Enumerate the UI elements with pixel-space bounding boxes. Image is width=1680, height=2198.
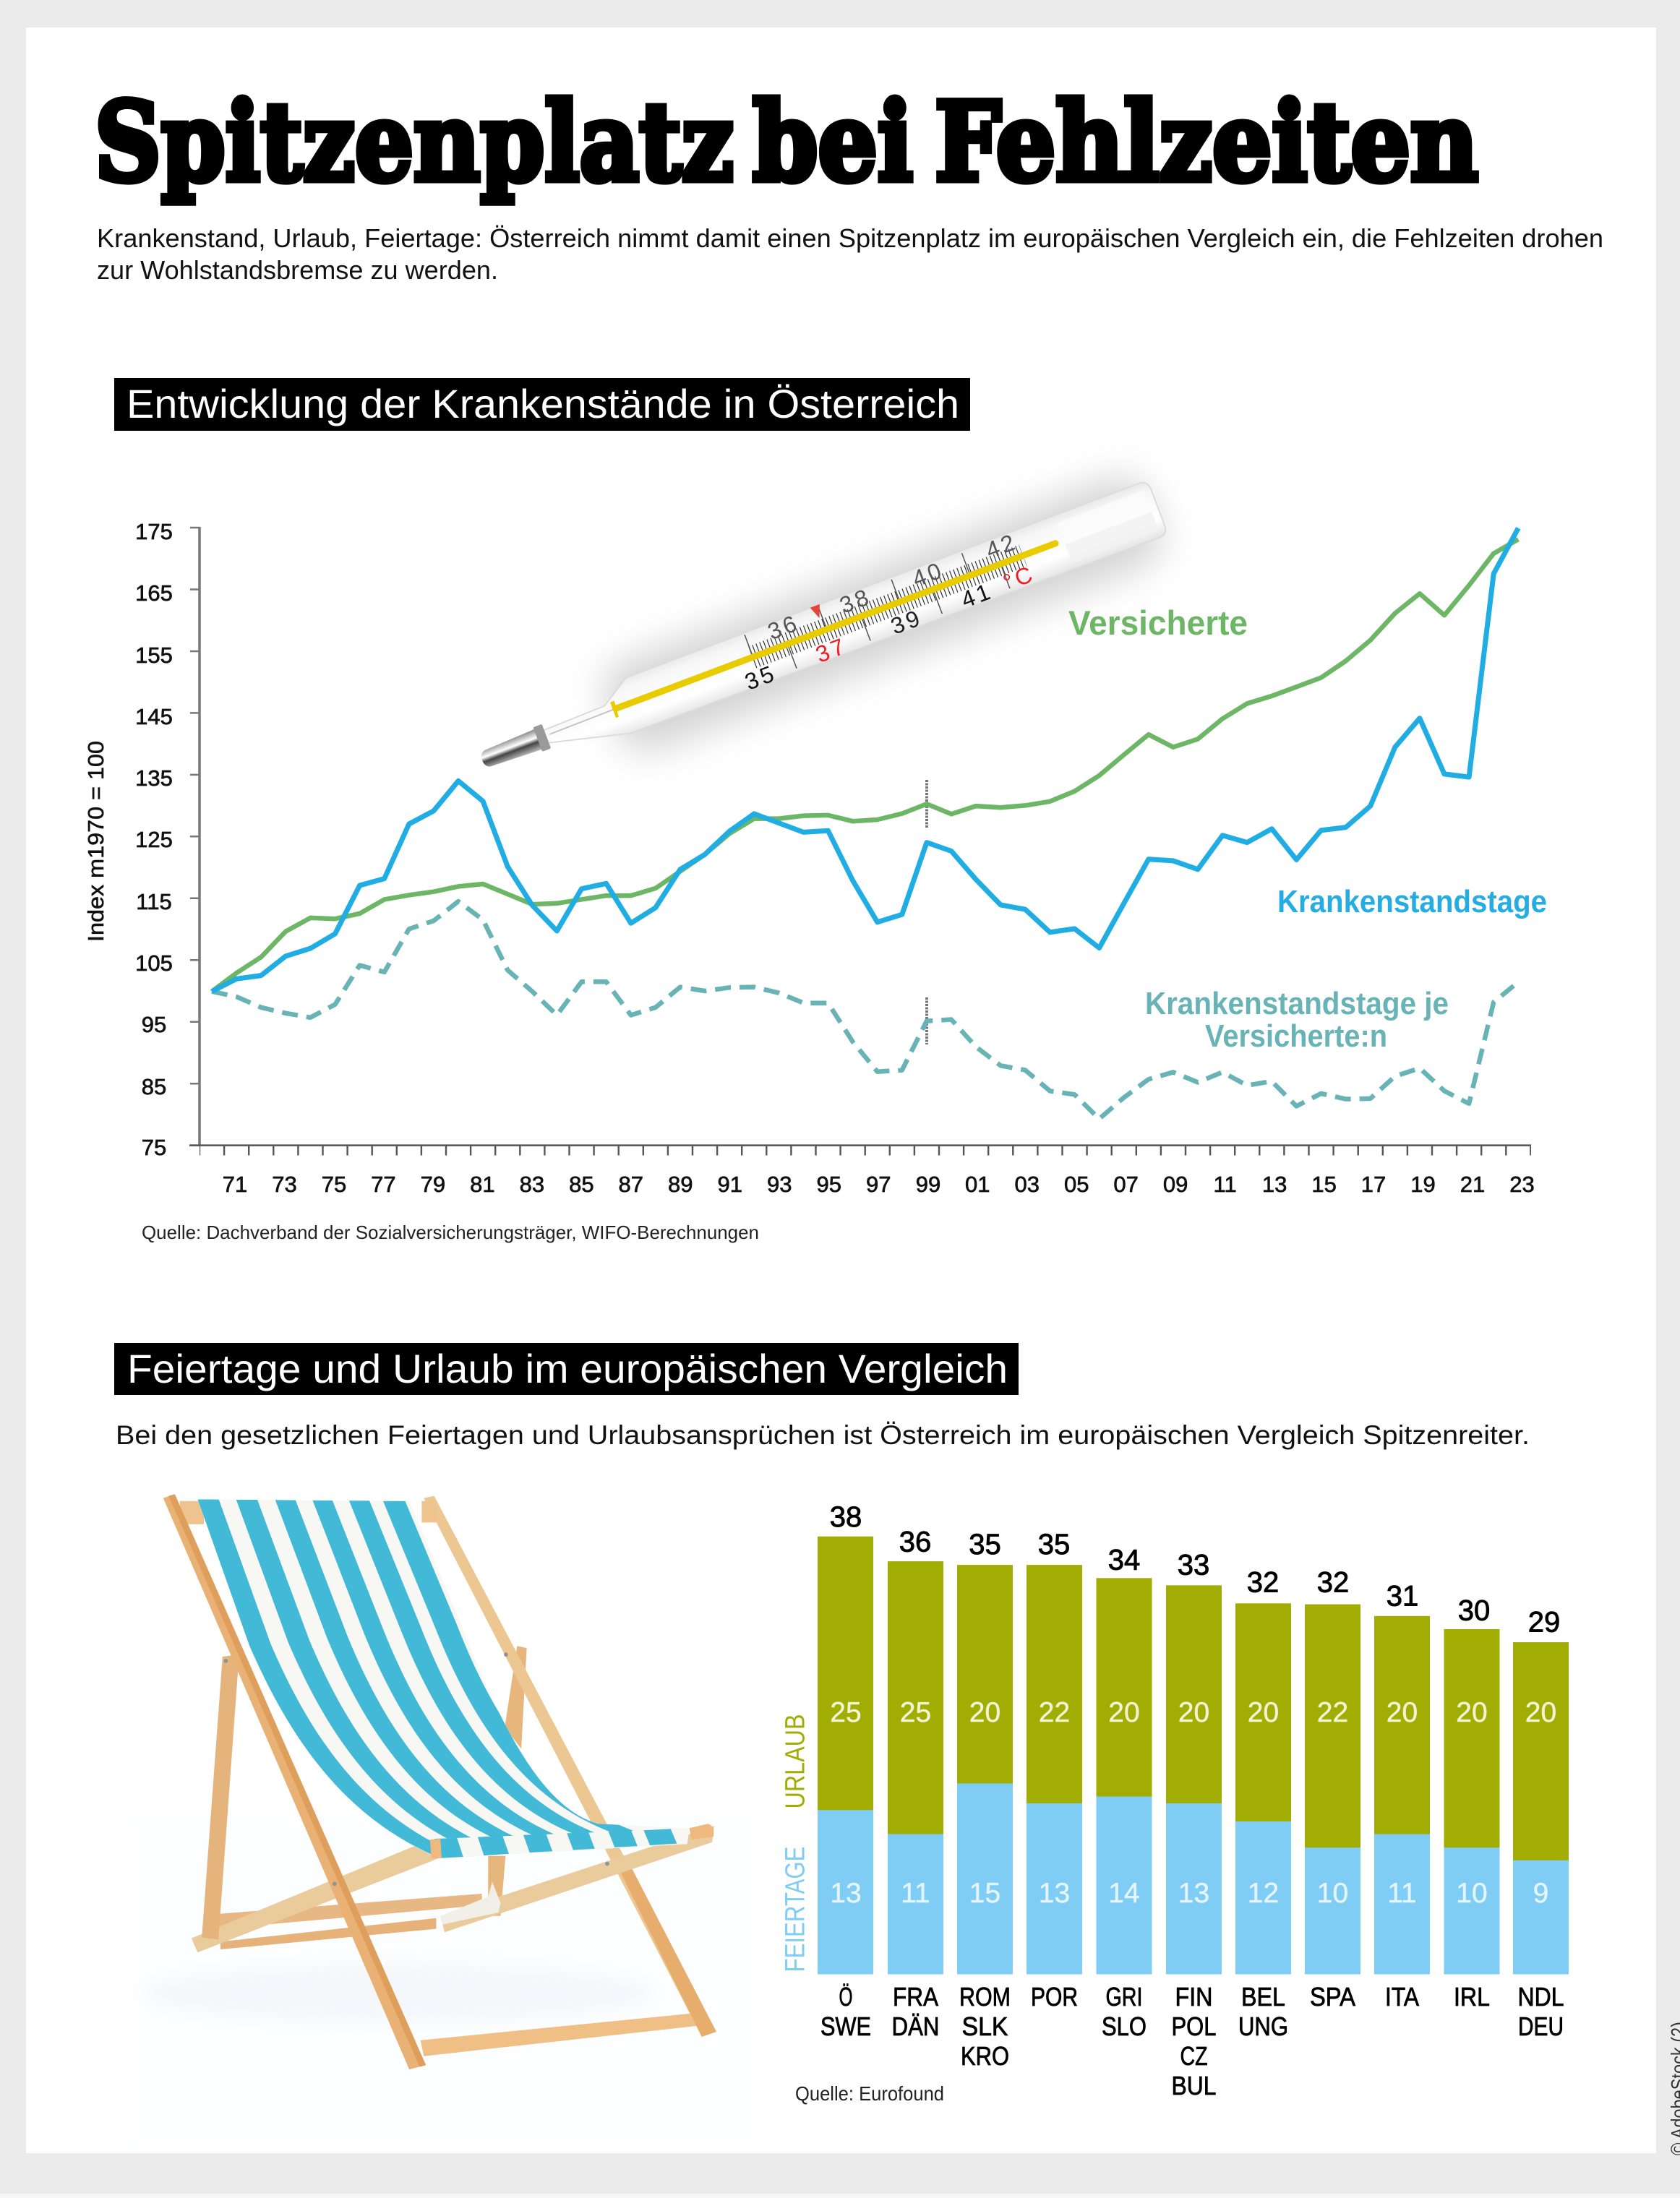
country labels: SPA <box>1310 1982 1355 2012</box>
Feiertage values: 13 <box>1178 1878 1209 1909</box>
x axis labels: 05 <box>1064 1172 1089 1197</box>
icon: thermometer: 37 <box>812 632 851 668</box>
title: Spitzenplatz <box>95 79 734 206</box>
line chart: Entwicklung der Krankenstände <box>83 519 1547 1197</box>
x axis labels: 03 <box>1014 1172 1040 1197</box>
x axis labels: 77 <box>371 1172 396 1197</box>
y axis title: Index m1970 = 100 <box>83 741 108 942</box>
Feiertage values: 11 <box>901 1878 930 1909</box>
x axis labels: 15 <box>1311 1172 1337 1197</box>
x axis labels: 75 <box>322 1172 346 1197</box>
x axis labels: 23 <box>1509 1172 1535 1197</box>
totals: 38 <box>830 1501 862 1533</box>
Feiertage values: 10 <box>1317 1878 1348 1909</box>
Urlaub values: 20 <box>1248 1697 1279 1728</box>
icon: thermometer: 39 <box>887 604 926 640</box>
x axis labels: 81 <box>470 1172 495 1197</box>
y axis labels: 75 <box>142 1135 166 1160</box>
x axis labels: 93 <box>767 1172 792 1197</box>
x axis <box>189 1146 1531 1151</box>
icon: thermometer: 41 <box>958 578 996 613</box>
country labels: ROM <box>959 1982 1011 2012</box>
x axis labels: 95 <box>817 1172 841 1197</box>
title <box>95 79 1478 206</box>
x axis labels: 87 <box>619 1172 643 1197</box>
Urlaub values: 20 <box>1456 1697 1488 1728</box>
totals: 33 <box>1178 1550 1209 1581</box>
y axis labels: 155 <box>135 643 173 668</box>
country labels: SWE <box>820 2012 871 2041</box>
seat band <box>436 1829 690 1858</box>
country labels: FIN <box>1175 1982 1213 2012</box>
x axis labels: 13 <box>1262 1172 1287 1197</box>
source note: bars: Quelle: Eurofound <box>795 2082 944 2105</box>
line: Krankenstandstage je Versicherte:n <box>212 901 1518 1119</box>
country labels: FRA <box>893 1982 938 2012</box>
Feiertage values: 15 <box>969 1878 1000 1909</box>
Feiertage values <box>830 1878 1548 1909</box>
series: Urlaub bars <box>818 1537 1569 1861</box>
y axis <box>190 527 200 1146</box>
Feiertage values: 14 <box>1108 1878 1140 1909</box>
x axis labels: 83 <box>520 1172 544 1197</box>
intro text <box>97 223 1603 285</box>
Feiertage values: 13 <box>830 1878 862 1909</box>
Urlaub values: 22 <box>1039 1697 1070 1728</box>
left arm <box>192 1839 442 1952</box>
Urlaub values: 22 <box>1317 1697 1348 1728</box>
country labels: NDL <box>1518 1982 1564 2012</box>
x axis labels: 07 <box>1113 1172 1139 1197</box>
series label: Krankenstandstage je Versicherte:n: Versicherte:n <box>1205 1018 1387 1054</box>
country labels: SLK <box>961 2012 1008 2041</box>
series label: Krankenstandstage je Versicherte:n: Krankenstandstage je <box>1145 986 1449 1021</box>
y axis labels: 95 <box>142 1012 166 1037</box>
country labels: CZ <box>1180 2041 1207 2071</box>
country labels: DÄN <box>892 2012 940 2041</box>
Urlaub values: 20 <box>1108 1697 1140 1728</box>
sub text: Bei den gesetzlichen Feiertagen und Urlaubsansprüchen ist Österreich im europäischen Vergleich Spitzenreiter. <box>116 1420 1530 1450</box>
Feiertage values: 11 <box>1387 1878 1417 1909</box>
y axis labels: 125 <box>135 827 173 852</box>
right arm <box>440 1826 714 1932</box>
foot bar <box>421 2012 703 2056</box>
y axis labels: 85 <box>142 1074 166 1099</box>
icon: thermometer <box>468 468 1175 808</box>
left rail <box>163 1494 426 2069</box>
x axis labels: 09 <box>1163 1172 1188 1197</box>
Feiertage values: 13 <box>1039 1878 1070 1909</box>
totals: 35 <box>969 1529 1001 1561</box>
country labels: GRI <box>1106 1982 1142 2012</box>
totals: 34 <box>1108 1544 1140 1576</box>
Urlaub values: 20 <box>1525 1697 1556 1728</box>
x axis labels: 89 <box>668 1172 693 1197</box>
country labels: POL <box>1171 2012 1216 2041</box>
icon: thermometer: 36 <box>764 609 802 645</box>
icon: thermometer: 38 <box>836 583 875 619</box>
y axis labels: 175 <box>135 519 173 544</box>
Urlaub values: 25 <box>830 1697 862 1728</box>
y axis labels: 145 <box>135 704 173 729</box>
right rail <box>424 1496 716 2037</box>
country labels: BEL <box>1241 1982 1285 2012</box>
intro text: Krankenstand, Urlaub, Feiertage: Österreich nimmt damit einen Spitzenplatz im europäischen Vergleich ein, die Fehlzeiten drohen <box>97 223 1603 253</box>
x axis labels: 11 <box>1214 1172 1237 1197</box>
country labels: ITA <box>1385 1982 1419 2012</box>
country labels: DEU <box>1518 2012 1564 2041</box>
Feiertage values: 9 <box>1533 1878 1548 1909</box>
series label: Krankenstandstage: Krankenstandstage <box>1277 884 1547 919</box>
y axis labels: 165 <box>135 580 173 606</box>
x axis labels: 01 <box>965 1172 990 1197</box>
country labels: BUL <box>1171 2071 1216 2100</box>
country labels <box>820 1982 1564 2100</box>
series label: Krankenstandstage je Versicherte:n <box>1145 986 1449 1054</box>
totals: 32 <box>1317 1567 1349 1599</box>
country labels: Ö <box>839 1982 853 2012</box>
x axis labels: 19 <box>1410 1172 1436 1197</box>
totals <box>830 1501 1560 1638</box>
totals: 36 <box>899 1527 931 1558</box>
y axis labels <box>135 519 173 1160</box>
legend: Urlaub: URLAUB <box>781 1714 811 1808</box>
intro text: zur Wohlstandsbremse zu werden. <box>97 255 498 285</box>
x axis labels: 71 <box>223 1172 247 1197</box>
cross dowels <box>218 1894 482 1929</box>
totals: 31 <box>1387 1580 1418 1612</box>
y axis labels: 115 <box>136 889 172 914</box>
line: Versicherte <box>212 539 1518 992</box>
break markers 1999 <box>925 780 928 1044</box>
Urlaub values: 20 <box>1387 1697 1418 1728</box>
icon: deck chair <box>157 1494 716 2070</box>
series label: Versicherte: Versicherte <box>1068 604 1248 642</box>
country labels: POR <box>1031 1982 1078 2012</box>
Feiertage values: 12 <box>1248 1878 1279 1909</box>
x axis labels <box>223 1172 1535 1197</box>
country labels: UNG <box>1238 2012 1288 2041</box>
icon: thermometer: 40 <box>909 557 948 592</box>
country labels: SLO <box>1102 2012 1147 2041</box>
x axis labels: 91 <box>718 1172 742 1197</box>
x axis labels: 73 <box>272 1172 297 1197</box>
x axis labels: 21 <box>1460 1172 1485 1197</box>
Feiertage values: 10 <box>1456 1878 1488 1909</box>
bracket <box>440 1881 500 1925</box>
icon: thermometer: °C <box>1000 560 1039 596</box>
left support leg <box>202 1654 239 1939</box>
Urlaub values: 20 <box>1178 1697 1209 1728</box>
y axis labels: 135 <box>135 765 173 791</box>
seat rod ends <box>690 1824 713 1839</box>
totals: 30 <box>1458 1594 1490 1626</box>
stacked bar chart: Feiertage und Urlaub <box>781 1501 1569 2100</box>
heading: Feiertage und Urlaub: Feiertage und Urlaub im europäischen Vergleich <box>127 1346 1008 1391</box>
legend: Feiertage: FEIERTAGE <box>781 1846 811 1972</box>
totals: 35 <box>1038 1529 1070 1561</box>
title: bei <box>753 79 913 206</box>
icon: thermometer: 35 <box>741 660 780 695</box>
totals: 29 <box>1528 1606 1560 1638</box>
x axis labels: 97 <box>866 1172 891 1197</box>
Urlaub values <box>830 1697 1556 1728</box>
x axis labels: 79 <box>421 1172 445 1197</box>
x axis labels: 85 <box>569 1172 594 1197</box>
top dowels <box>180 1501 204 1524</box>
totals: 32 <box>1247 1567 1279 1599</box>
fabric <box>192 1492 698 1865</box>
country labels: IRL <box>1454 1982 1490 2012</box>
country labels: KRO <box>961 2041 1009 2071</box>
x axis labels: 99 <box>916 1172 940 1197</box>
series: Feiertage bars <box>818 1783 1569 1975</box>
back support leg <box>488 1646 527 1916</box>
Urlaub values: 25 <box>900 1697 931 1728</box>
y axis labels: 105 <box>135 950 173 976</box>
heading: Entwicklung der Krankenstände: Entwicklung der Krankenstände in Österreich <box>127 381 959 426</box>
seat stripes <box>434 1829 677 1858</box>
x axis labels: 17 <box>1361 1172 1386 1197</box>
title: Fehlzeiten <box>935 79 1478 206</box>
Urlaub values: 20 <box>969 1697 1000 1728</box>
line: Krankenstandstage <box>212 528 1518 992</box>
icon: thermometer: 42 <box>982 528 1021 564</box>
screws <box>224 1652 609 1886</box>
source note: chart: Quelle: Dachverband der Sozialversicherungsträger, WIFO-Berechnungen <box>142 1222 759 1243</box>
